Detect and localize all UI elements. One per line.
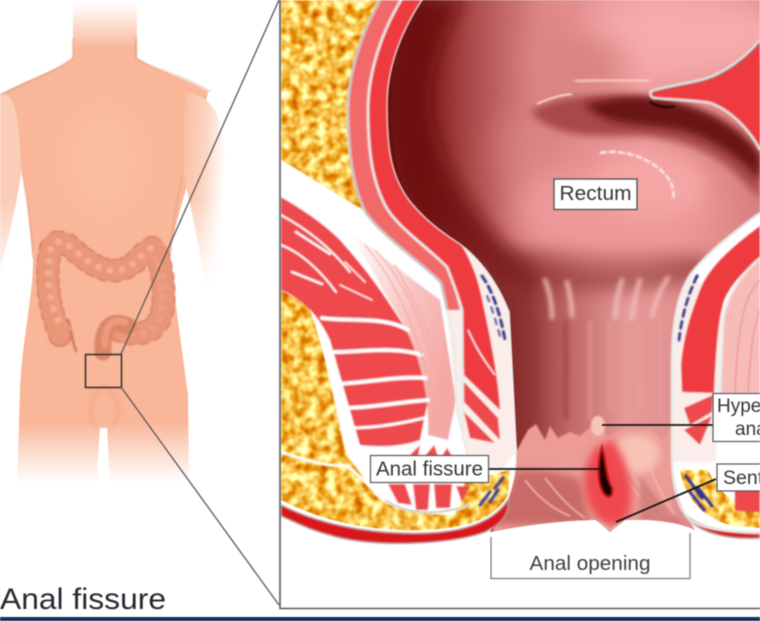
lower right fat tissue [680, 469, 760, 529]
inflamed area around fissure [584, 440, 631, 525]
lower left fat tissue [281, 285, 516, 535]
anal canal [490, 240, 700, 540]
label: Sentinel pile [616, 464, 760, 522]
neck outline and shoulders [0, 38, 210, 95]
sentinel pile [596, 518, 625, 531]
upper left fat tissue [280, 0, 383, 211]
canal folds [545, 278, 668, 318]
left arm [0, 94, 21, 270]
pale area right of fissure [612, 434, 660, 474]
rectal fold dark core [585, 97, 760, 180]
lower right skin [682, 512, 760, 538]
fold soft shadow [530, 95, 760, 200]
lower left canal shading [495, 470, 590, 525]
bracket: Anal opening: Anal opening [530, 553, 650, 575]
right arm [184, 92, 223, 272]
lower muscle strips [388, 484, 470, 510]
label: Anal fissure: Anal fissure [376, 458, 483, 480]
torso side outlines [22, 172, 183, 258]
panel: rectum cross-section [281, 0, 760, 578]
right wall white base [672, 275, 722, 462]
inner sphincter strips [464, 382, 500, 443]
bulb underside shadow [482, 246, 718, 290]
label: Rectum: Rectum [560, 183, 632, 205]
blue vessels [482, 276, 505, 340]
lower skin left [281, 500, 508, 543]
label: Anal fissure [370, 456, 600, 482]
upper right rectal fold wedge [650, 40, 760, 152]
dentate line and lower canal [492, 424, 671, 532]
gluteal muscle [281, 160, 470, 515]
right red band [681, 226, 760, 393]
rectum lumen [380, 0, 760, 540]
body silhouette [0, 3, 208, 490]
mucosal highlight [600, 152, 673, 198]
bracket: Anal opening [491, 533, 690, 578]
right rectal wall [672, 213, 760, 532]
right outer pink fan [720, 258, 760, 393]
human torso figure [0, 3, 226, 490]
left rectal wall [347, 0, 517, 522]
zoom lines [121, 0, 279, 605]
upper lumen colour [380, 0, 760, 300]
upper right pale area [585, 0, 760, 80]
label: Rectum [554, 179, 637, 210]
label: Hypertrophied anal papilla [602, 394, 760, 442]
outer pink layer [347, 0, 460, 310]
fissure tear [599, 447, 612, 497]
magnifier box [86, 354, 122, 388]
fold crest highlights [575, 80, 650, 82]
panel frame [280, 0, 760, 608]
inner red layer [367, 0, 500, 410]
mid rose glow [491, 121, 524, 178]
wall white base [448, 248, 516, 472]
title: Anal fissure [0, 583, 166, 616]
wall lining lines [348, 0, 517, 522]
dark left shadow [391, 0, 540, 320]
footer bar [0, 617, 760, 621]
lower bulb pink [515, 160, 715, 260]
white lining line across fat [281, 452, 470, 512]
hypertrophied papilla [591, 416, 605, 436]
icon: colon [48, 242, 164, 352]
